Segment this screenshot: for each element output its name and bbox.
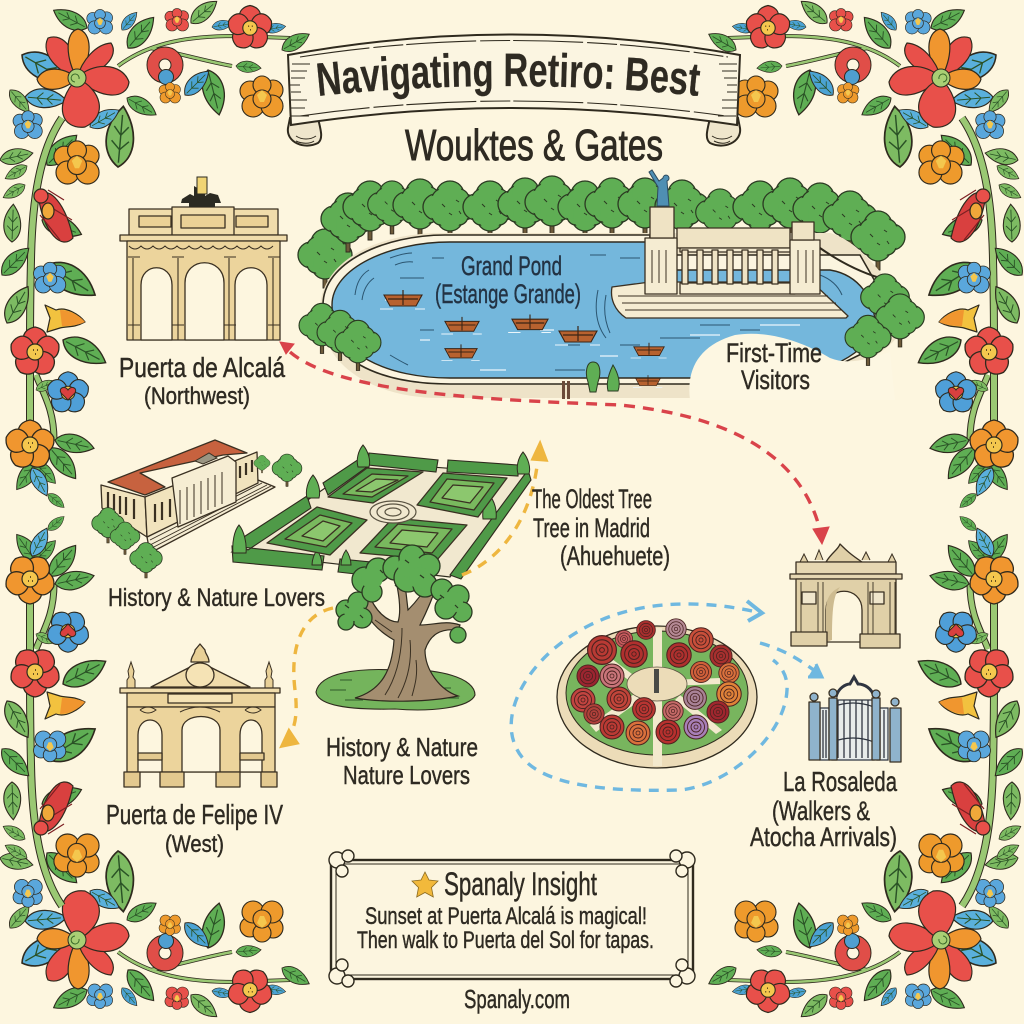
red dashed route (280, 342, 829, 544)
label: Puerta de Felipe IV: Puerta de Felipe IV (106, 799, 283, 830)
label: oldest tree (532, 484, 670, 571)
illustration: rose garden (557, 619, 757, 768)
title ribbon (286, 34, 742, 147)
insight body: Then walk to Puerta del Sol for tapas. (357, 927, 654, 954)
insight heading: Spanaly Insight (444, 866, 597, 902)
label: oldest tree: (Ahuehuete) (560, 541, 670, 571)
label: history and nature (center): Nature Lovers (343, 760, 470, 790)
yellow dashed routes (282, 444, 546, 746)
icon: star (412, 872, 438, 897)
right vine lower (913, 513, 1024, 906)
gate: Puerta de Felipe IV (120, 644, 280, 787)
front-right trees (845, 274, 924, 366)
gate: tan arch (790, 544, 902, 648)
label: La Rosaleda (750, 766, 897, 852)
trunk and branches (355, 575, 460, 701)
Monument to Alfonso XII (612, 170, 880, 318)
first-time visitors label: First-Time (726, 338, 822, 368)
label: history and nature (center): History & Nature (326, 732, 478, 762)
bottom right corner flowers (705, 834, 1020, 1023)
label: La Rosaleda: (Walkers & (772, 796, 870, 826)
label: oldest tree: The Oldest Tree (532, 484, 652, 514)
label: Puerta de Alcala: Puerta de Alcalá (119, 352, 285, 383)
pond label (435, 251, 581, 309)
insight body (357, 903, 654, 954)
white callout bubble (689, 334, 895, 400)
label: La Rosaleda: Atocha Arrivals) (750, 822, 897, 852)
label: La Rosaleda: La Rosaleda (783, 766, 897, 797)
title line 1: Navigating Retiro: Best (317, 52, 700, 100)
cypress trees and visitors (562, 362, 619, 399)
callout: Spanaly Insight (329, 850, 695, 987)
canopy (336, 545, 472, 643)
right vine upper (913, 118, 1024, 511)
label: Puerta de Felipe IV: (West) (165, 831, 224, 858)
left vine upper (0, 118, 111, 511)
boats (380, 290, 667, 388)
museum trees (92, 454, 302, 578)
quadriga statue (181, 186, 221, 207)
water ripples (355, 253, 842, 370)
label: Puerta de Alcala: (Northwest) (144, 383, 250, 410)
gate: blue iron gate (809, 677, 901, 762)
grass mound (316, 670, 475, 710)
illustration: Prado museum (92, 440, 302, 578)
label: Puerta de Alcala (119, 352, 285, 410)
bottom left corner flowers (0, 834, 313, 1023)
top right corner flowers (705, 0, 1020, 184)
left vine lower (0, 513, 111, 906)
front-left trees (299, 303, 381, 370)
pond ground and rim (320, 233, 905, 398)
flower beds (267, 468, 507, 560)
illustration: Ahuehuete oldest tree (316, 545, 475, 710)
label: Puerta de Felipe IV (106, 799, 283, 858)
statue (649, 170, 669, 206)
gate: Puerta de Alcala (120, 177, 287, 340)
central fountain (370, 501, 416, 523)
insight body: Sunset at Puerta Alcalá is magical! (365, 903, 647, 930)
label: history and nature lovers (left): History & Nature Lovers (108, 584, 325, 612)
illustration: formal parterre garden (232, 445, 531, 580)
scroll curls (288, 118, 740, 146)
first-time visitors label: Visitors (741, 365, 810, 395)
top left corner flowers (0, 0, 313, 184)
illustration: Grand Pond (298, 170, 924, 400)
pond water (332, 242, 875, 378)
cone shrubs (233, 445, 530, 565)
blue dashed routes (511, 601, 822, 790)
label: history and nature (center) (326, 732, 478, 790)
back row of trees (298, 176, 905, 288)
pond label: Grand Pond (461, 251, 562, 281)
pond label: (Estange Grande) (435, 279, 581, 309)
rose beds (571, 619, 741, 745)
hedges (232, 453, 531, 580)
title line 2: Wouktes & Gates (405, 121, 663, 170)
label: oldest tree: Tree in Madrid (533, 513, 650, 543)
footer: site name: Spanaly.com (464, 984, 570, 1014)
first-time visitors label (726, 338, 822, 395)
ornate frame (329, 850, 695, 987)
